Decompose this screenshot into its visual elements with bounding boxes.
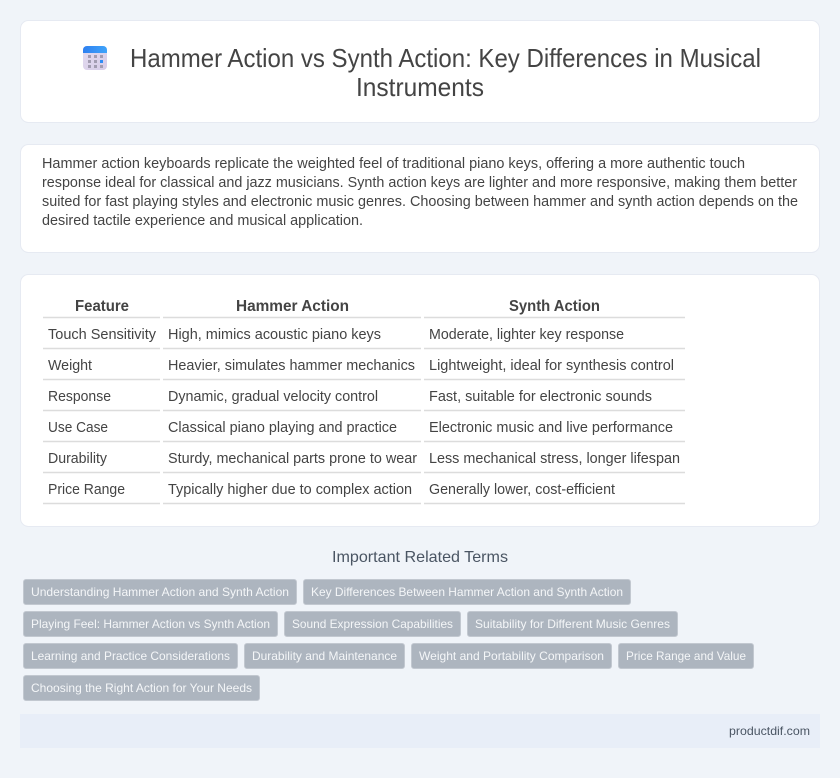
table header: Hammer Action: [236, 298, 349, 315]
panel: comparison table: [20, 274, 820, 526]
tag: [304, 580, 630, 604]
panel: header: [20, 20, 820, 122]
tag: Playing Feel: Hammer Action vs Synth Action: [31, 617, 270, 631]
title: Instruments: [356, 74, 484, 102]
row: durability: Sturdy, mechanical parts prone to wear: [168, 451, 417, 467]
tag: [24, 580, 296, 604]
intro paragraph: [42, 156, 798, 229]
row: use case: [48, 420, 673, 436]
title: [130, 45, 761, 102]
table header: Synth Action: [509, 298, 600, 315]
tag: Sound Expression Capabilities: [292, 617, 453, 631]
row: price range: Typically higher due to complex action: [168, 482, 412, 498]
footer site name: productdif.com: [729, 724, 810, 738]
icon: calendar keypad: [83, 46, 107, 70]
tag: Key Differences Between Hammer Action and Synth Action: [311, 585, 623, 599]
tag: [24, 612, 278, 636]
row: durability: Less mechanical stress, longer lifespan: [429, 451, 680, 467]
row: response: Response: [48, 389, 111, 405]
row: price range: Price Range: [48, 482, 125, 498]
intro paragraph: desired tactile experience and musical application.: [42, 213, 363, 229]
tag: [244, 644, 404, 668]
tag: Suitability for Different Music Genres: [475, 617, 670, 631]
tag: Price Range and Value: [626, 649, 746, 663]
intro paragraph: Hammer action keyboards replicate the weighted feel of traditional piano keys, offering a more authentic touch: [42, 156, 745, 172]
row: touch sensitivity: Touch Sensitivity: [48, 327, 157, 343]
row: use case: Electronic music and live performance: [429, 420, 673, 436]
tag: Learning and Practice Considerations: [31, 649, 230, 663]
row: touch sensitivity: [48, 327, 624, 343]
title: Hammer Action vs Synth Action: Key Differences in Musical: [130, 45, 761, 73]
intro paragraph: suited for fast playing styles and electronic music genres. Choosing between hammer and synth action depends on the: [42, 194, 798, 210]
tag: [412, 644, 612, 668]
row: weight: Lightweight, ideal for synthesis control: [429, 358, 674, 374]
tag: Choosing the Right Action for Your Needs: [31, 681, 252, 695]
row: price range: [48, 482, 615, 498]
heading: related terms: Important Related Terms: [332, 549, 508, 566]
row: touch sensitivity: High, mimics acoustic piano keys: [168, 327, 381, 343]
tag: [24, 676, 260, 700]
tag: Weight and Portability Comparison: [419, 649, 604, 663]
tag: [284, 612, 460, 636]
row: durability: Durability: [48, 451, 108, 467]
tag: Understanding Hammer Action and Synth Action: [31, 585, 289, 599]
row: weight: [48, 358, 674, 374]
tag: [468, 612, 678, 636]
row: weight: Weight: [48, 358, 92, 374]
tag: [618, 644, 754, 668]
tag: Durability and Maintenance: [252, 649, 397, 663]
row: price range: Generally lower, cost-efficient: [429, 482, 615, 498]
row: response: Dynamic, gradual velocity control: [168, 389, 378, 405]
intro paragraph: response ideal for classical and jazz musicians. Synth action keys are lighter and more responsive, making them better: [42, 175, 797, 191]
tags: related terms: [24, 580, 754, 700]
tag: [24, 644, 238, 668]
row: response: Fast, suitable for electronic sounds: [429, 389, 652, 405]
row: weight: Heavier, simulates hammer mechanics: [168, 358, 415, 374]
panel: intro: [20, 144, 820, 252]
row: touch sensitivity: Moderate, lighter key response: [429, 327, 624, 343]
row: use case: Classical piano playing and practice: [168, 420, 397, 436]
table header: [75, 298, 600, 315]
table header: Feature: [75, 298, 129, 315]
row: response: [48, 389, 652, 405]
footer: [20, 714, 820, 748]
row: durability: [48, 451, 680, 467]
row: use case: Use Case: [48, 420, 108, 436]
